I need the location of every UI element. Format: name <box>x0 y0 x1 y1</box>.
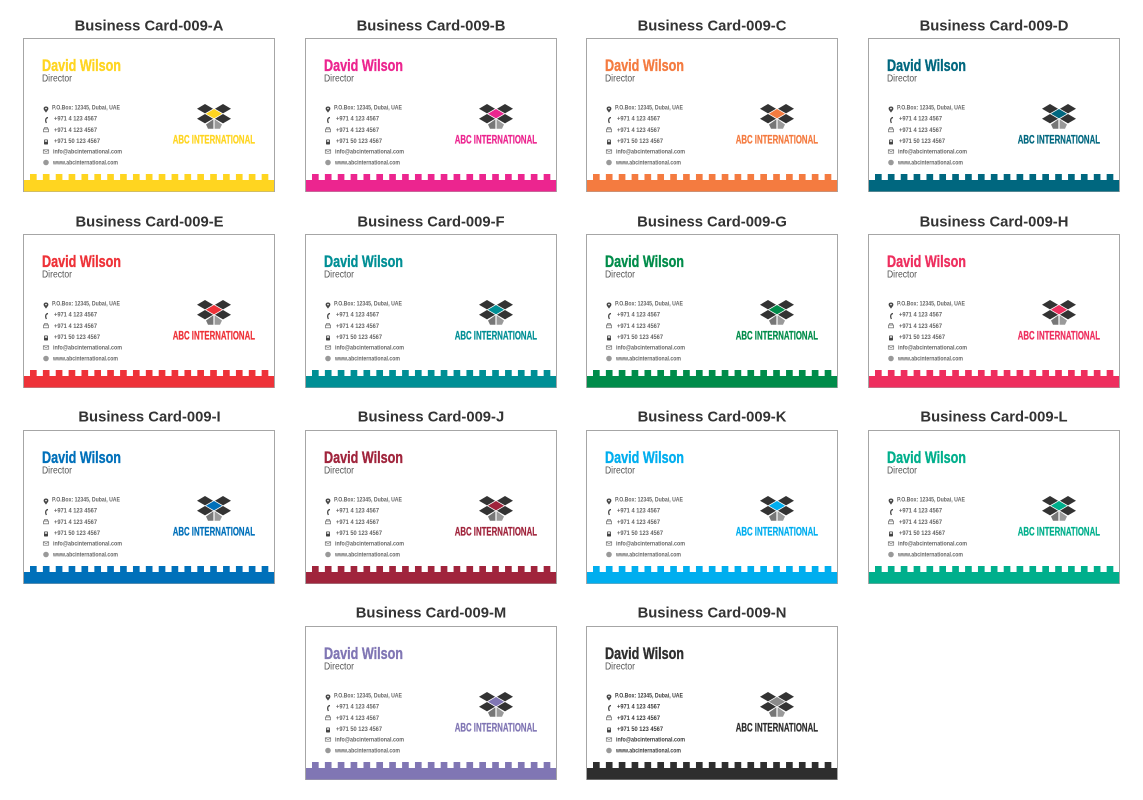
contact details: P.O.Box: 12345, Dubai, UAE <box>334 104 403 112</box>
card panel <box>868 430 1120 584</box>
title: Business Card-009-A <box>75 19 224 35</box>
footer band <box>306 765 556 780</box>
contact details <box>334 692 404 754</box>
contact details: +971 4 123 4567 <box>336 116 379 123</box>
contact details: info@abcinternational.com <box>616 149 685 156</box>
contact icons <box>43 498 49 557</box>
contact details: +971 50 123 4567 <box>336 138 382 145</box>
company name: ABC INTERNATIONAL <box>736 330 818 342</box>
contact details: info@abcinternational.com <box>898 149 967 156</box>
contact icons <box>888 302 894 361</box>
contact icons <box>325 106 331 165</box>
contact details <box>615 300 685 362</box>
title: Business Card-009-N <box>638 605 786 621</box>
contact details: +971 4 123 4567 <box>336 508 379 515</box>
footer band <box>24 373 274 388</box>
card panel <box>586 626 838 780</box>
logo mark <box>197 104 231 129</box>
contact details <box>897 104 967 166</box>
contact details: info@abcinternational.com <box>335 737 404 744</box>
card M <box>306 605 556 780</box>
footer band <box>587 569 837 584</box>
contact details: +971 4 123 4567 <box>617 116 660 123</box>
contact details: +971 4 123 4567 <box>617 312 660 319</box>
job title: Director <box>887 269 918 280</box>
company name: ABC INTERNATIONAL <box>455 722 537 734</box>
card panel <box>586 38 838 192</box>
contact details: +971 4 123 4567 <box>617 508 660 515</box>
footer band <box>869 569 1119 584</box>
contact details: P.O.Box: 12345, Dubai, UAE <box>334 300 403 308</box>
name: David Wilson <box>887 449 966 467</box>
footer band <box>869 177 1119 192</box>
company name: ABC INTERNATIONAL <box>455 526 537 538</box>
job title: Director <box>605 269 636 280</box>
title: Business Card-009-B <box>357 19 506 35</box>
title: Business Card-009-H <box>920 215 1068 231</box>
job title: Director <box>887 465 918 476</box>
contact details: +971 4 123 4567 <box>617 127 660 134</box>
title: Business Card-009-K <box>638 409 787 425</box>
title: Business Card-009-C <box>638 19 787 35</box>
contact details: info@abcinternational.com <box>616 541 685 548</box>
card A <box>24 19 274 192</box>
contact details: +971 4 123 4567 <box>899 127 942 134</box>
contact details: +971 50 123 4567 <box>899 334 945 341</box>
logo mark <box>760 300 794 325</box>
contact icons <box>325 302 331 361</box>
contact details: www.abcinternational.com <box>615 159 681 166</box>
contact details: P.O.Box: 12345, Dubai, UAE <box>334 496 403 504</box>
contact details: info@abcinternational.com <box>335 541 404 548</box>
contact icons <box>888 498 894 557</box>
name: David Wilson <box>42 449 121 467</box>
contact icons <box>43 302 49 361</box>
company name: ABC INTERNATIONAL <box>1018 526 1100 538</box>
card F <box>306 215 556 388</box>
contact details: www.abcinternational.com <box>334 551 400 558</box>
contact details <box>52 496 122 558</box>
title: Business Card-009-D <box>920 19 1069 35</box>
contact details: +971 50 123 4567 <box>336 530 382 537</box>
footer band <box>306 569 556 584</box>
contact icons <box>606 498 612 557</box>
contact details <box>897 300 967 362</box>
contact details: www.abcinternational.com <box>334 159 400 166</box>
contact details: +971 50 123 4567 <box>54 530 100 537</box>
contact details: +971 4 123 4567 <box>54 116 97 123</box>
card G <box>586 215 838 388</box>
contact details: www.abcinternational.com <box>897 355 963 362</box>
contact details <box>897 496 967 558</box>
company name: ABC INTERNATIONAL <box>455 134 537 146</box>
contact details: www.abcinternational.com <box>334 747 400 754</box>
contact details: +971 4 123 4567 <box>899 312 942 319</box>
contact details: +971 50 123 4567 <box>899 138 945 145</box>
footer band <box>306 373 556 388</box>
contact details: info@abcinternational.com <box>335 149 404 156</box>
contact details: P.O.Box: 12345, Dubai, UAE <box>897 300 966 308</box>
contact details: info@abcinternational.com <box>898 345 967 352</box>
name: David Wilson <box>42 57 121 75</box>
title: Business Card-009-I <box>78 409 221 425</box>
company name: ABC INTERNATIONAL <box>736 134 818 146</box>
contact icons <box>888 106 894 165</box>
contact details: www.abcinternational.com <box>897 551 963 558</box>
contact details: info@abcinternational.com <box>335 345 404 352</box>
name: David Wilson <box>324 449 403 467</box>
job title: Director <box>42 465 73 476</box>
job title: Director <box>324 73 355 84</box>
contact details: info@abcinternational.com <box>898 541 967 548</box>
contact details: www.abcinternational.com <box>52 551 118 558</box>
logo mark <box>1042 496 1076 521</box>
card panel <box>306 38 556 192</box>
company name: ABC INTERNATIONAL <box>455 330 537 342</box>
contact details: +971 50 123 4567 <box>336 726 382 733</box>
contact details: +971 4 123 4567 <box>899 323 942 330</box>
contact details: P.O.Box: 12345, Dubai, UAE <box>615 496 684 504</box>
contact details: +971 4 123 4567 <box>899 508 942 515</box>
logo mark <box>197 300 231 325</box>
card panel <box>24 430 274 584</box>
contact details: P.O.Box: 12345, Dubai, UAE <box>615 104 684 112</box>
contact details: +971 4 123 4567 <box>54 519 97 526</box>
contact details: info@abcinternational.com <box>53 149 122 156</box>
contact details: +971 4 123 4567 <box>617 715 660 722</box>
contact details: +971 4 123 4567 <box>336 519 379 526</box>
contact details: www.abcinternational.com <box>334 355 400 362</box>
card panel <box>586 234 838 388</box>
contact icons <box>606 106 612 165</box>
card panel <box>868 38 1120 192</box>
card B <box>306 19 556 192</box>
contact details <box>52 104 122 166</box>
contact icons <box>606 694 612 753</box>
name: David Wilson <box>887 253 966 271</box>
name: David Wilson <box>324 253 403 271</box>
contact details: +971 4 123 4567 <box>54 508 97 515</box>
name: David Wilson <box>605 449 684 467</box>
logo mark <box>1042 300 1076 325</box>
card panel <box>306 626 556 780</box>
name: David Wilson <box>605 253 684 271</box>
footer band <box>587 373 837 388</box>
contact details: info@abcinternational.com <box>616 737 685 744</box>
title: Business Card-009-G <box>637 215 787 231</box>
contact details: P.O.Box: 12345, Dubai, UAE <box>897 496 966 504</box>
card H <box>868 215 1120 388</box>
contact details: +971 50 123 4567 <box>54 334 100 341</box>
contact details: +971 4 123 4567 <box>336 127 379 134</box>
contact details: +971 50 123 4567 <box>336 334 382 341</box>
contact icons <box>325 694 331 753</box>
contact details: +971 4 123 4567 <box>336 323 379 330</box>
footer band <box>24 569 274 584</box>
footer band <box>306 177 556 192</box>
contact details: P.O.Box: 12345, Dubai, UAE <box>52 496 121 504</box>
contact details: www.abcinternational.com <box>52 159 118 166</box>
logo mark <box>197 496 231 521</box>
footer band <box>587 765 837 780</box>
contact details: +971 4 123 4567 <box>617 519 660 526</box>
logo mark <box>479 496 513 521</box>
contact details <box>334 496 404 558</box>
contact details: +971 4 123 4567 <box>617 323 660 330</box>
contact details: P.O.Box: 12345, Dubai, UAE <box>615 692 684 700</box>
contact details: +971 4 123 4567 <box>899 519 942 526</box>
contact icons <box>43 106 49 165</box>
title: Business Card-009-J <box>358 409 504 425</box>
contact details <box>615 104 685 166</box>
contact details: +971 4 123 4567 <box>54 312 97 319</box>
contact details: P.O.Box: 12345, Dubai, UAE <box>334 692 403 700</box>
company name: ABC INTERNATIONAL <box>1018 134 1100 146</box>
contact details: +971 50 123 4567 <box>617 138 663 145</box>
name: David Wilson <box>605 57 684 75</box>
job title: Director <box>605 661 636 672</box>
contact details <box>615 496 685 558</box>
company name: ABC INTERNATIONAL <box>173 134 255 146</box>
contact details: +971 4 123 4567 <box>54 323 97 330</box>
card panel <box>306 234 556 388</box>
contact icons <box>325 498 331 557</box>
job title: Director <box>887 73 918 84</box>
name: David Wilson <box>42 253 121 271</box>
contact details: +971 4 123 4567 <box>336 704 379 711</box>
contact details: info@abcinternational.com <box>616 345 685 352</box>
contact details: +971 50 123 4567 <box>54 138 100 145</box>
logo mark <box>760 104 794 129</box>
contact details: +971 4 123 4567 <box>617 704 660 711</box>
footer band <box>869 373 1119 388</box>
card I <box>24 409 274 584</box>
job title: Director <box>324 661 355 672</box>
footer band <box>24 177 274 192</box>
contact icons <box>606 302 612 361</box>
job title: Director <box>42 269 73 280</box>
contact details: www.abcinternational.com <box>52 355 118 362</box>
name: David Wilson <box>605 645 684 663</box>
contact details <box>52 300 122 362</box>
contact details: P.O.Box: 12345, Dubai, UAE <box>615 300 684 308</box>
logo mark <box>1042 104 1076 129</box>
contact details: +971 4 123 4567 <box>336 715 379 722</box>
contact details <box>334 104 404 166</box>
logo mark <box>760 692 794 717</box>
card E <box>24 215 274 388</box>
contact details: P.O.Box: 12345, Dubai, UAE <box>52 300 121 308</box>
contact details <box>334 300 404 362</box>
name: David Wilson <box>887 57 966 75</box>
logo mark <box>760 496 794 521</box>
contact details: P.O.Box: 12345, Dubai, UAE <box>897 104 966 112</box>
logo mark <box>479 692 513 717</box>
card J <box>306 409 556 584</box>
contact details: +971 4 123 4567 <box>54 127 97 134</box>
name: David Wilson <box>324 57 403 75</box>
logo mark <box>479 300 513 325</box>
contact details: www.abcinternational.com <box>897 159 963 166</box>
job title: Director <box>605 465 636 476</box>
job title: Director <box>324 269 355 280</box>
logo mark <box>479 104 513 129</box>
card panel <box>306 430 556 584</box>
card K <box>586 409 838 584</box>
contact details: www.abcinternational.com <box>615 747 681 754</box>
contact details: P.O.Box: 12345, Dubai, UAE <box>52 104 121 112</box>
name: David Wilson <box>324 645 403 663</box>
card panel <box>24 38 274 192</box>
title: Business Card-009-M <box>356 605 506 621</box>
title: Business Card-009-L <box>920 409 1068 425</box>
contact details: +971 50 123 4567 <box>899 530 945 537</box>
company name: ABC INTERNATIONAL <box>1018 330 1100 342</box>
title: Business Card-009-E <box>75 215 224 231</box>
card panel <box>24 234 274 388</box>
job title: Director <box>605 73 636 84</box>
contact details: www.abcinternational.com <box>615 551 681 558</box>
contact details: +971 50 123 4567 <box>617 334 663 341</box>
company name: ABC INTERNATIONAL <box>736 722 818 734</box>
job title: Director <box>42 73 73 84</box>
company name: ABC INTERNATIONAL <box>173 526 255 538</box>
title: Business Card-009-F <box>357 215 505 231</box>
contact details: info@abcinternational.com <box>53 345 122 352</box>
company name: ABC INTERNATIONAL <box>173 330 255 342</box>
contact details: info@abcinternational.com <box>53 541 122 548</box>
contact details: +971 4 123 4567 <box>336 312 379 319</box>
contact details <box>615 692 685 754</box>
card L <box>868 409 1120 584</box>
contact details: +971 50 123 4567 <box>617 726 663 733</box>
card N <box>586 605 838 780</box>
contact details: +971 4 123 4567 <box>899 116 942 123</box>
contact details: www.abcinternational.com <box>615 355 681 362</box>
card C <box>586 19 838 192</box>
contact details: +971 50 123 4567 <box>617 530 663 537</box>
card panel <box>868 234 1120 388</box>
company name: ABC INTERNATIONAL <box>736 526 818 538</box>
card D <box>868 19 1120 192</box>
footer band <box>587 177 837 192</box>
card panel <box>586 430 838 584</box>
job title: Director <box>324 465 355 476</box>
